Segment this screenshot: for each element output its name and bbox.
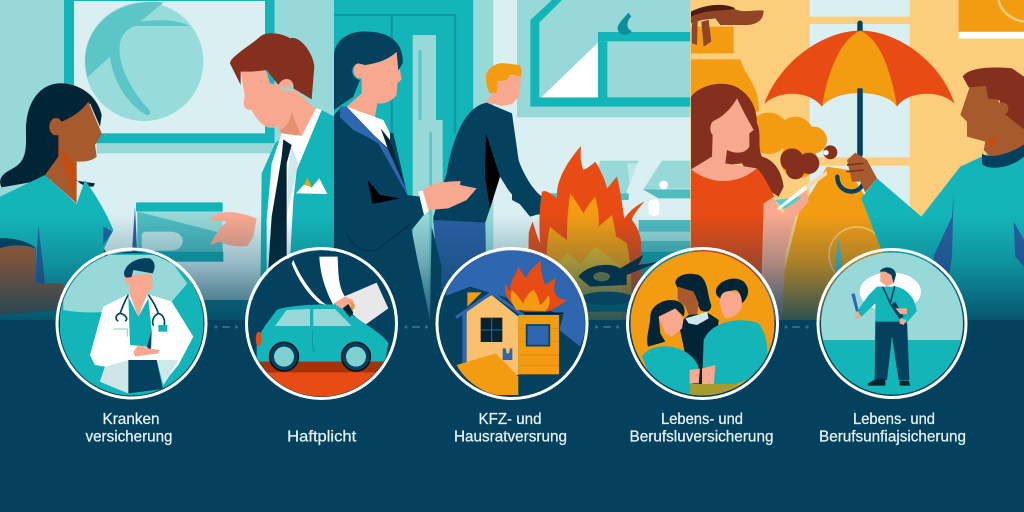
label: Lebens- und Berufs (family): Lebens- und	[661, 411, 743, 428]
panel: car section background	[512, 0, 691, 320]
icon: car (Haftpflicht)	[246, 248, 397, 402]
icon: doctor (Krankenversicherung)	[57, 249, 206, 398]
gradient fade into navy band	[0, 215, 1024, 320]
icon: standing professional (Berufsunfall)	[818, 250, 966, 398]
label: Lebens- und Berufs (worker)	[819, 411, 966, 446]
illustration: woman in navy suit	[334, 32, 477, 320]
label: Lebens- und Berufs (family)	[630, 411, 774, 446]
label: Haftpflicht: Haftplicht	[287, 428, 357, 446]
panel: health office background	[0, 0, 512, 322]
panel: navy footer band	[0, 320, 1024, 512]
illustration: man in teal suit	[209, 33, 334, 320]
illustration: umbrella	[764, 21, 955, 192]
icon: family (Lebens- und Berufsunfaehigkeit)	[628, 248, 778, 398]
panel: illustrated scene	[0, 0, 1024, 322]
illustration: woman in teal scrubs	[0, 83, 135, 320]
label: Krankenversicherung: Kranken	[102, 411, 160, 428]
illustration: folder with mug on desk	[132, 202, 263, 320]
illustration: burnt wreckage	[578, 255, 660, 312]
label: Krankenversicherung	[86, 411, 172, 446]
dotted connectors between icons	[214, 325, 809, 329]
label: Lebens- und Berufs (worker): Lebens- und	[853, 411, 935, 428]
illustration: man in navy jacket, back view	[430, 63, 542, 320]
icon: burning house (KFZ und Hausrat)	[437, 248, 593, 398]
illustration: fire	[512, 133, 644, 320]
label: Lebens- und Berufs (worker): Berufsunfiajsicherung	[819, 428, 966, 446]
label: KFZ und Hausrat	[454, 411, 567, 446]
panel: family section background	[690, 0, 1024, 320]
illustration: woman with phone	[691, 84, 909, 320]
illustration: man holding umbrella	[846, 68, 1024, 320]
label: KFZ und Hausrat: Hausratversrung	[454, 428, 567, 446]
label: Lebens- und Berufs (family): Berufsluversicherung	[630, 428, 774, 446]
label: Krankenversicherung: versicherung	[86, 428, 172, 446]
label: KFZ und Hausrat: KFZ- und	[478, 411, 542, 428]
